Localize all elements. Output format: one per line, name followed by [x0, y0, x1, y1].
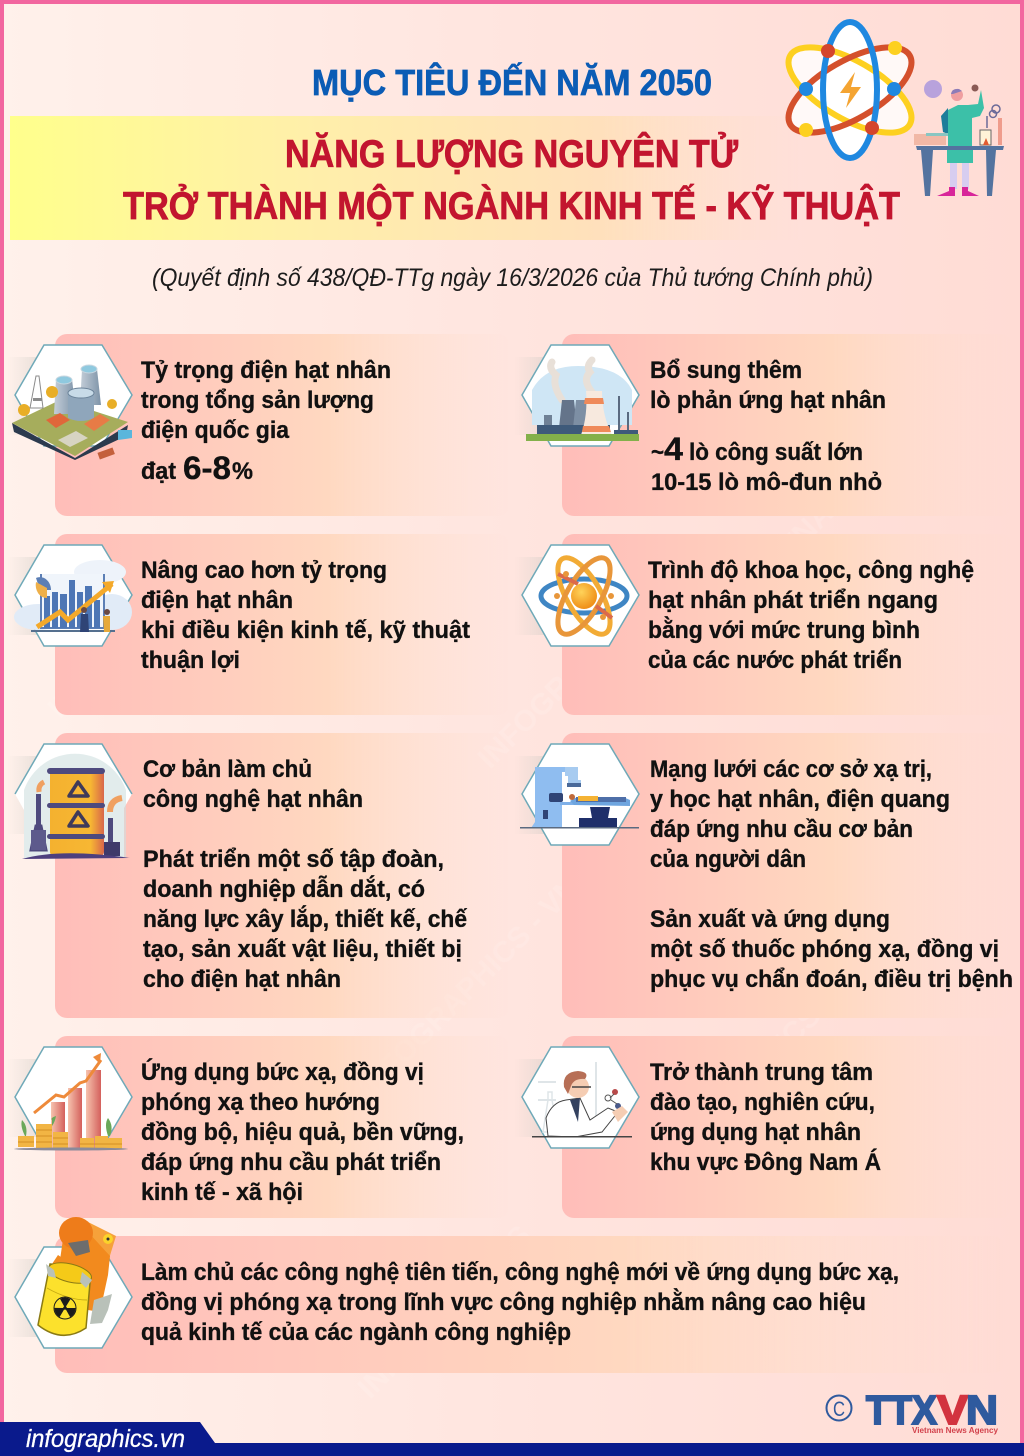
text: doanh nghiệp dẫn dắt, có: [143, 875, 425, 903]
text: đồng vị phóng xạ trong lĩnh vực công nghiệp nhằm nâng cao hiệu: [141, 1288, 866, 1316]
text: [141, 557, 470, 674]
text: lò phản ứng hạt nhân: [650, 387, 886, 414]
panel: radiotherapy network: [515, 733, 1013, 1018]
text: đáp ứng nhu cầu cơ bản: [650, 816, 913, 843]
text: ứng dụng hạt nhân: [650, 1119, 861, 1146]
text: [650, 756, 1013, 993]
text: đáp ứng nhu cầu phát triển: [141, 1149, 441, 1176]
text: kinh tế - xã hội: [141, 1179, 303, 1206]
icon: nuclear plant isometric: [8, 345, 132, 460]
watermark: INFOGRAPHICS: [352, 1219, 538, 1405]
text: đồng bộ, hiệu quả, bền vững,: [141, 1119, 464, 1146]
icon: growth chart: [8, 545, 132, 646]
panel: more reactors: [515, 334, 1012, 516]
text: bằng với mức trung bình: [648, 616, 920, 644]
text: [141, 1259, 899, 1346]
watermark: VNA: [772, 497, 840, 565]
text: [143, 756, 468, 993]
icon: scientist at lab table: [914, 80, 1004, 196]
text: Nâng cao hơn tỷ trọng: [141, 557, 387, 584]
icon: radiotherapy machine: [515, 744, 639, 845]
logo: TTXVN: C: [833, 1398, 845, 1421]
text: khu vực Đông Nam Á: [650, 1148, 881, 1176]
panel: mastering technology: [8, 733, 510, 1018]
text: của người dân: [650, 846, 806, 873]
text: Ứng dụng bức xạ, đồng vị: [141, 1058, 424, 1086]
subtitle: (Quyết định số 438/QĐ-TTg ngày 16/3/2026 của Thủ tướng Chính phủ): [152, 264, 873, 292]
text: [648, 557, 974, 674]
icon: rising bars and coins: [8, 1047, 132, 1150]
icon: cooling towers: [515, 345, 639, 446]
watermark: INFOGRAPHICS - VNA: [352, 855, 601, 1105]
text: đào tạo, nghiên cứu,: [650, 1089, 875, 1116]
panel: nuclear share: [8, 334, 510, 516]
title: NĂNG LƯỢNG NGUYÊN TỬ: [285, 132, 739, 176]
icon: scientist with molecule: [515, 1047, 639, 1148]
logo: TTXVN: V: [937, 1387, 969, 1433]
logo: TTXVN: TTX: [866, 1387, 937, 1433]
text: [141, 1058, 464, 1206]
text: phóng xạ theo hướng: [141, 1089, 380, 1116]
text: Sản xuất và ứng dụng: [650, 906, 890, 933]
watermark: INFOGRAPHICS: [472, 589, 658, 775]
title: [123, 132, 900, 228]
text: 4: [664, 431, 683, 467]
text: điện hạt nhân: [141, 587, 293, 614]
logo: TTXVN: [826, 1387, 999, 1435]
text: Làm chủ các công nghệ tiên tiến, công nghệ mới về ứng dụng bức xạ,: [141, 1259, 899, 1286]
text: ~: [651, 439, 664, 466]
footer bar: [0, 1422, 1024, 1456]
heading: target year: MỤC TIÊU ĐẾN NĂM 2050: [312, 61, 712, 103]
text: phục vụ chẩn đoán, điều trị bệnh: [650, 966, 1013, 993]
text: Cơ bản làm chủ: [143, 756, 312, 783]
text: điện quốc gia: [141, 417, 290, 444]
panel: advanced technology: [8, 1217, 1005, 1373]
watermark: [42, 497, 840, 1405]
text: Bổ sung thêm: [650, 357, 802, 384]
title band: [10, 116, 800, 240]
text: của các nước phát triển: [648, 647, 902, 674]
text: thuận lợi: [141, 647, 240, 674]
panel: radiation applications: [8, 1036, 510, 1218]
text: %: [232, 458, 253, 485]
text: năng lực xây lắp, thiết kế, chế: [143, 905, 468, 933]
text: cho điện hạt nhân: [143, 966, 341, 993]
logo: TTXVN: Vietnam News Agency: [912, 1426, 999, 1435]
text: hạt nhân phát triển ngang: [648, 587, 938, 614]
text: [650, 357, 886, 496]
text: 6-8: [183, 450, 231, 486]
text: quả kinh tế của các ngành công nghiệp: [141, 1319, 571, 1346]
icon: worker with radioactive barrel: [8, 1217, 132, 1348]
title: TRỞ THÀNH MỘT NGÀNH KINH TẾ - KỸ THUẬT: [123, 183, 900, 228]
text: Trình độ khoa học, công nghệ: [648, 557, 974, 584]
panel: science level: [515, 534, 1012, 715]
footer site name: infographics.vn: [26, 1425, 185, 1453]
icon: atom: [774, 22, 926, 158]
text: khi điều kiện kinh tế, kỹ thuật: [141, 617, 470, 644]
text: [141, 357, 391, 486]
text: [650, 1059, 881, 1176]
watermark: INFOGRAPHICS: [42, 539, 228, 725]
text: 10-15 lò mô-đun nhỏ: [651, 469, 882, 496]
text: trong tổng sản lượng: [141, 387, 374, 414]
text: y học hạt nhân, điện quang: [650, 786, 950, 813]
panel: regional hub: [515, 1036, 1012, 1218]
text: lò công suất lớn: [689, 439, 863, 466]
text: đạt: [141, 458, 176, 485]
text: Tỷ trọng điện hạt nhân: [141, 357, 391, 384]
text: tạo, sản xuất vật liệu, thiết bị: [143, 936, 462, 963]
watermark: INFOGRAPHICS: [642, 999, 828, 1185]
icon: nuclear waste drum: [8, 744, 132, 859]
icon: colourful atom: [515, 545, 639, 646]
text: công nghệ hạt nhân: [143, 786, 363, 813]
text: Mạng lưới các cơ sở xạ trị,: [650, 756, 932, 783]
text: một số thuốc phóng xạ, đồng vị: [650, 936, 999, 963]
panel: higher share: [8, 534, 510, 715]
text: Phát triển một số tập đoàn,: [143, 846, 444, 873]
text: Trở thành trung tâm: [650, 1059, 873, 1086]
logo: TTXVN: N: [966, 1387, 998, 1433]
